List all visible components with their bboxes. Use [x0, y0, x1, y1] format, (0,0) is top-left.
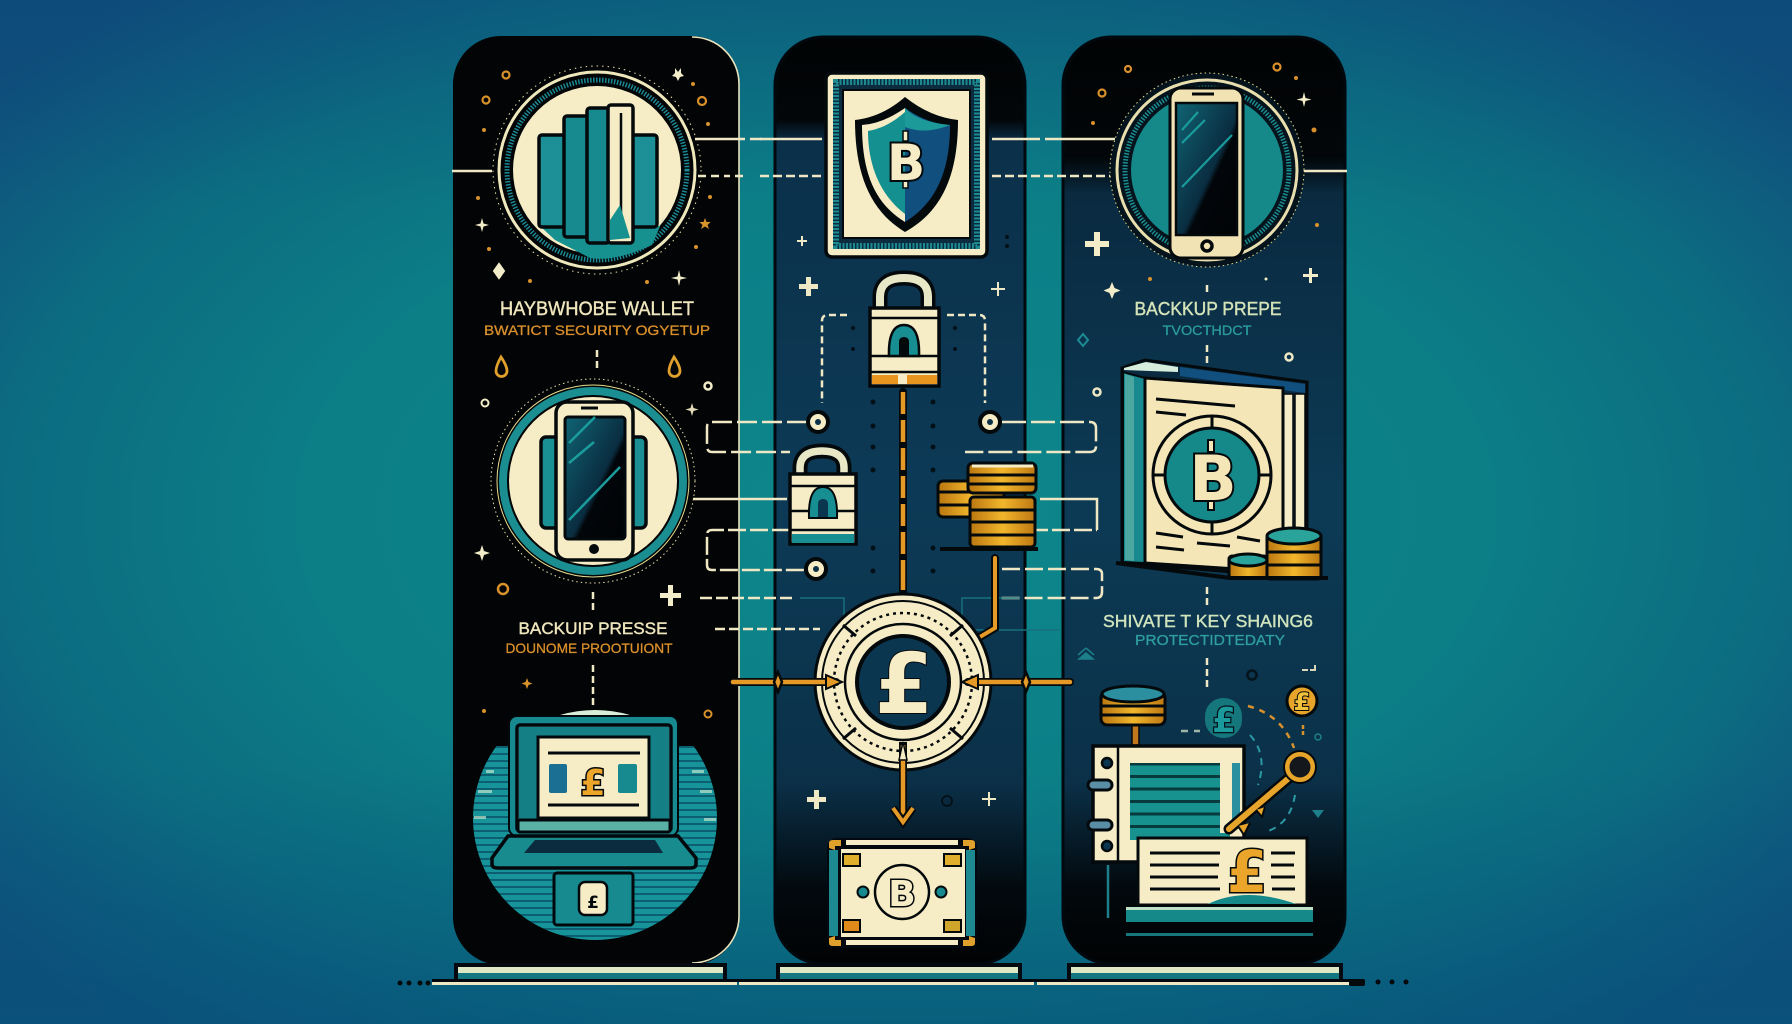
base plinths	[454, 963, 1343, 981]
decorations: left column middle	[474, 382, 712, 718]
arrow: down to wallet	[893, 742, 913, 822]
icon: pound ring	[815, 594, 991, 770]
heading: left title 1	[484, 299, 710, 338]
heading: right title 1: BACKKUP PREPE	[1134, 299, 1282, 319]
icon: laptop in striped circle	[473, 696, 717, 940]
node centres	[813, 419, 993, 572]
heading: right title 2: SHIVATE T KEY SHAING6	[1103, 611, 1313, 631]
icon: bitcoin book	[1122, 360, 1307, 575]
decorations: left column top	[475, 68, 712, 286]
icon: gold pound coin: £	[1294, 688, 1310, 716]
icon: pound ring: £	[875, 635, 933, 733]
icons: connector nodes	[806, 412, 1000, 579]
icon: padlock lower	[790, 451, 856, 544]
heading: right title 1	[1134, 299, 1282, 338]
icon: document with teal lines	[1088, 746, 1244, 862]
decorations: right column top	[1078, 64, 1319, 396]
heading: left title 1: BWATICT SECURITY OGYETUP	[484, 322, 710, 338]
heading: right title 2: PROTECTIDTEDATY	[1135, 633, 1285, 649]
icon: laptop in striped circle: £	[587, 893, 599, 913]
icon: teal pound coin and dashes: £	[1212, 701, 1236, 741]
panel: left column	[453, 36, 739, 965]
heading: left title 2	[506, 620, 673, 656]
panel: right column	[1063, 37, 1345, 964]
icon: gold coin stacks	[938, 463, 1038, 549]
arrow: left into ring	[733, 672, 842, 692]
arrow: centre orange vertical	[899, 392, 907, 622]
icon: receipt with pound	[1126, 838, 1313, 936]
heading: left title 2: DOUNOME PROOTUIONT	[506, 640, 673, 656]
decorations: right column lower	[1078, 648, 1324, 918]
icon: receipt with pound: £	[1227, 838, 1267, 906]
decoration: dark dotted columns	[851, 235, 1009, 806]
decorations: middle column	[797, 236, 1005, 809]
arrow: L shaped orange	[958, 558, 995, 650]
heading: right title 2	[1103, 611, 1313, 649]
icon: bitcoin glyph on book: B	[1189, 442, 1237, 515]
icon: books circle	[493, 66, 701, 274]
arrow: right into ring	[962, 672, 1070, 692]
icon: laptop in striped circle: £	[580, 763, 606, 804]
faint teal brackets in middle column	[800, 598, 1060, 630]
ground line with end dots	[398, 979, 1408, 986]
heading: left title 2: BACKUIP PRESSE	[518, 620, 668, 638]
icon: gold pound coin	[1287, 686, 1317, 716]
icon: phone circle right	[1110, 73, 1304, 267]
panel: middle column	[775, 37, 1025, 964]
icon: phone circle	[491, 379, 695, 583]
icon: coin stacks beside book	[1116, 528, 1328, 579]
icon: padlock top	[870, 278, 939, 386]
heading: right title 1: TVOCTHDCT	[1162, 322, 1252, 338]
heading: left title 1: HAYBWHOBE WALLET	[500, 299, 694, 320]
icon: bitcoin wallet	[827, 838, 977, 948]
icon: gold key	[1229, 751, 1316, 835]
icons: gold drops	[496, 357, 680, 376]
icon: teal pound coin and dashes	[1181, 698, 1303, 832]
icon: bitcoin on shield: B	[887, 134, 925, 192]
icon: lower coin stack	[1101, 686, 1165, 745]
icon: shield card	[826, 73, 987, 257]
icon: bitcoin wallet: B	[888, 874, 916, 915]
connector lines between columns	[452, 139, 1347, 705]
